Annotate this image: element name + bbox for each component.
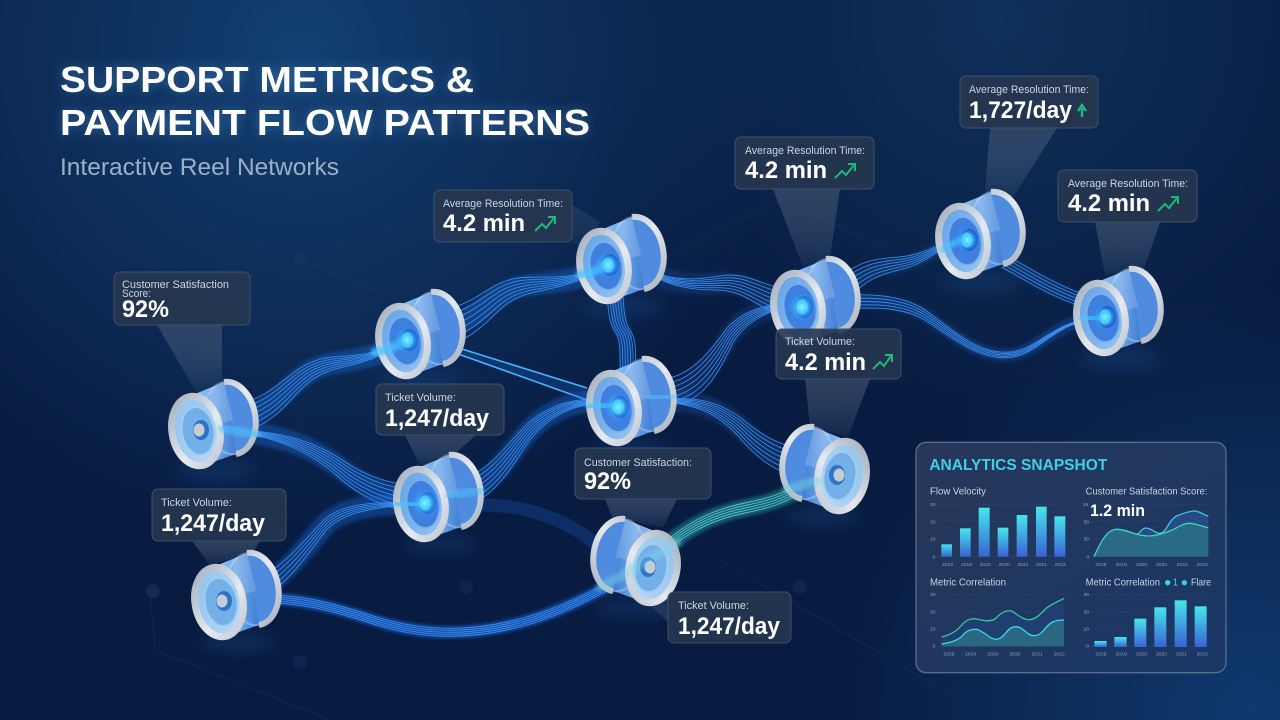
flow: reel 4 to reel 9 xyxy=(664,290,813,404)
flow: reel 5 to reel 6 xyxy=(256,494,436,598)
chart: metric correlation lines: 10 xyxy=(930,627,936,633)
chart: flow velocity bars: 2021 xyxy=(1017,562,1029,568)
chart: customer satisfaction score area: 15 xyxy=(1083,502,1088,508)
legend xyxy=(1165,578,1211,589)
chart: flow velocity bars: Flow Velocity xyxy=(930,486,986,497)
callout: customer satisfaction 92%: Customer Satisfaction: xyxy=(584,457,692,469)
chart: metric correlation bars with legend: 30 xyxy=(1083,609,1089,615)
callout: customer satisfaction 92%: 92% xyxy=(584,468,631,495)
chart: customer satisfaction score area: 1.2 min xyxy=(1090,502,1145,520)
callout: average resolution time, reel 11: 4.2 min xyxy=(1068,190,1150,217)
callout: average resolution time, reel 9: 4.2 min xyxy=(745,157,827,184)
chart: metric correlation lines: 2020 xyxy=(1009,651,1021,657)
callout: ticket volume 4.2 min: 4.2 min xyxy=(785,349,866,376)
chart: flow velocity bars: 0 xyxy=(933,554,936,560)
chart: metric correlation lines: 30 xyxy=(930,592,936,598)
flow: reel 4 to reel 5 xyxy=(425,386,629,516)
reel 1 xyxy=(166,378,261,480)
chart: metric correlation bars with legend: 30 xyxy=(1083,592,1089,598)
chart: metric correlation lines: 2022 xyxy=(1054,651,1065,657)
chart: customer satisfaction score area: 0 xyxy=(1087,554,1090,560)
callout: ticket volume, reel 7: Ticket Volume: xyxy=(678,600,749,612)
chart: metric correlation bars with legend: 10 xyxy=(1083,627,1089,633)
chart: customer satisfaction score area: 2019 xyxy=(1095,562,1107,568)
chart: flow velocity bars: 2022 xyxy=(1055,562,1066,568)
callout: customer satisfaction score xyxy=(114,272,250,325)
chart: customer satisfaction score area: 2021 xyxy=(1177,562,1188,568)
flow: reel 3 to reel 4 xyxy=(607,260,636,375)
callout: ticket volume 4.2 min xyxy=(776,329,901,379)
chart: flow velocity bars: 2020 xyxy=(999,562,1010,568)
callout: customer satisfaction score: 92% xyxy=(122,296,169,323)
reel 10 xyxy=(933,188,1028,290)
chart: metric correlation bars with legend xyxy=(1083,578,1211,657)
flow: reel 5 to reel 7 xyxy=(480,505,605,552)
chart: metric correlation lines xyxy=(930,578,1065,657)
callout: customer satisfaction score: Customer Satisfaction xyxy=(122,279,229,291)
chart: customer satisfaction score area: 2019 xyxy=(1116,562,1127,568)
reel 5 xyxy=(391,451,486,553)
chart: flow velocity bars xyxy=(930,486,1067,568)
flow: reel 9 to reel 11 xyxy=(829,294,1106,363)
flow: reel 3 to reel 9 xyxy=(631,248,803,319)
callout: average resolution time, reel 3: 4.2 min xyxy=(443,210,525,237)
chart: flow velocity bars: 2019 xyxy=(942,562,953,568)
chart: customer satisfaction score area: 30 xyxy=(1083,537,1089,543)
chart: metric correlation lines: 2020 xyxy=(987,651,999,657)
flow: reel 10 to reel 11 xyxy=(1001,257,1094,308)
chart: metric correlation lines: Metric Correlation xyxy=(930,578,1006,589)
callout: ticket volume 4.2 min: Ticket Volume: xyxy=(785,336,855,348)
chart: metric correlation bars with legend: 2022 xyxy=(1197,651,1208,657)
chart: flow velocity bars: 2020 xyxy=(980,562,991,568)
callout: customer satisfaction 92% xyxy=(575,448,711,499)
reel 9 xyxy=(768,255,863,357)
chart: flow velocity bars: 2019 xyxy=(961,562,972,568)
panel: analytics snapshot xyxy=(916,442,1226,673)
chart: metric correlation bars with legend: 2019 xyxy=(1116,651,1127,657)
chart: metric correlation bars with legend: Metric Correlation xyxy=(1086,578,1160,589)
reel 8 xyxy=(777,423,872,525)
callout: ticket volume, reel 7: 1,247/day xyxy=(678,613,781,640)
chart: flow velocity bars: 30 xyxy=(930,502,936,508)
chart: metric correlation lines: 2019 xyxy=(965,651,976,657)
reel 11 xyxy=(1071,265,1166,367)
flow: reel 1 to reel 2 xyxy=(234,327,414,431)
reel 4 xyxy=(584,355,679,457)
flow: reel 4 to reel 8 xyxy=(644,385,820,479)
reel 3 xyxy=(574,213,669,315)
light beams through reels xyxy=(223,227,1118,597)
chart: customer satisfaction score area: 30 xyxy=(1083,519,1089,525)
callout: customer satisfaction score: Score: xyxy=(122,288,151,300)
callout: average resolution time, reel 9 xyxy=(735,137,874,189)
chart: customer satisfaction score area xyxy=(1083,486,1208,568)
chart: metric correlation bars with legend: 2021 xyxy=(1176,651,1187,657)
chart: metric correlation lines: 2019 xyxy=(943,651,955,657)
reel 2 xyxy=(373,288,468,390)
title xyxy=(60,59,590,143)
flow: reel 1 to reel 5 xyxy=(220,416,436,514)
chart: customer satisfaction score area: 2022 xyxy=(1197,562,1208,568)
callout: average resolution time, reel 11: Average Resolution Time: xyxy=(1068,178,1188,190)
chart: customer satisfaction score area: 2020 xyxy=(1156,562,1167,568)
flow: reel 9 to reel 10 xyxy=(840,225,972,298)
chart: metric correlation lines: 2021 xyxy=(1032,651,1043,657)
chart: metric correlation lines: 0 xyxy=(933,644,936,650)
callout: ticket volume, reel 6: Ticket Volume: xyxy=(161,497,232,509)
chart: metric correlation bars with legend: 2020 xyxy=(1136,651,1147,657)
legend: Flare xyxy=(1191,578,1211,589)
callout: average resolution time, reel 3: Average Resolution Time: xyxy=(443,198,563,210)
callout: ticket volume 1,247/day: Ticket Volume: xyxy=(385,392,456,404)
flow: reel 6 to reel 7 xyxy=(250,564,645,636)
subtitle: Interactive Reel Networks xyxy=(60,154,339,181)
chart: metric correlation bars with legend: 2020 xyxy=(1156,651,1167,657)
chart: metric correlation lines: 20 xyxy=(930,609,936,615)
callout: ticket volume 1,247/day xyxy=(376,384,504,435)
panel heading: ANALYTICS SNAPSHOT xyxy=(929,457,1108,474)
flow: reel 7 to reel 8 xyxy=(650,475,812,567)
reel 7 xyxy=(588,515,683,617)
callout: average resolution time 1,727/day: 1,727/day xyxy=(969,97,1073,124)
callout: average resolution time, reel 11 xyxy=(1058,170,1197,222)
callout: ticket volume, reel 6: 1,247/day xyxy=(161,510,266,537)
callout: ticket volume 1,247/day: 1,247/day xyxy=(385,405,490,432)
callout: average resolution time 1,727/day: Average Resolution Time: xyxy=(969,84,1089,96)
chart: customer satisfaction score area: Customer Satisfaction Score: xyxy=(1086,486,1207,497)
chart: flow velocity bars: 20 xyxy=(930,519,936,525)
reel 6 xyxy=(189,549,284,651)
callout: average resolution time, reel 3 xyxy=(434,190,572,242)
title: PAYMENT FLOW PATTERNS xyxy=(60,102,590,143)
title: SUPPORT METRICS & xyxy=(60,59,474,100)
flow: reel 2 to reel 3 xyxy=(434,246,610,347)
chart: customer satisfaction score area: 2020 xyxy=(1136,562,1147,568)
flow: reel 2 to reel 4 xyxy=(433,340,587,400)
chart: flow velocity bars: 10 xyxy=(930,537,936,543)
chart: metric correlation bars with legend: 0 xyxy=(1086,644,1089,650)
callout: average resolution time, reel 9: Average Resolution Time: xyxy=(745,145,865,157)
callout: average resolution time 1,727/day xyxy=(960,76,1098,128)
callout tails xyxy=(157,128,1160,622)
chart: flow velocity bars: 2021 xyxy=(1036,562,1047,568)
callout: ticket volume, reel 6 xyxy=(152,489,286,541)
legend: 1 xyxy=(1173,578,1178,589)
callout: ticket volume, reel 7 xyxy=(668,592,791,643)
chart: metric correlation bars with legend: 2019 xyxy=(1095,651,1107,657)
